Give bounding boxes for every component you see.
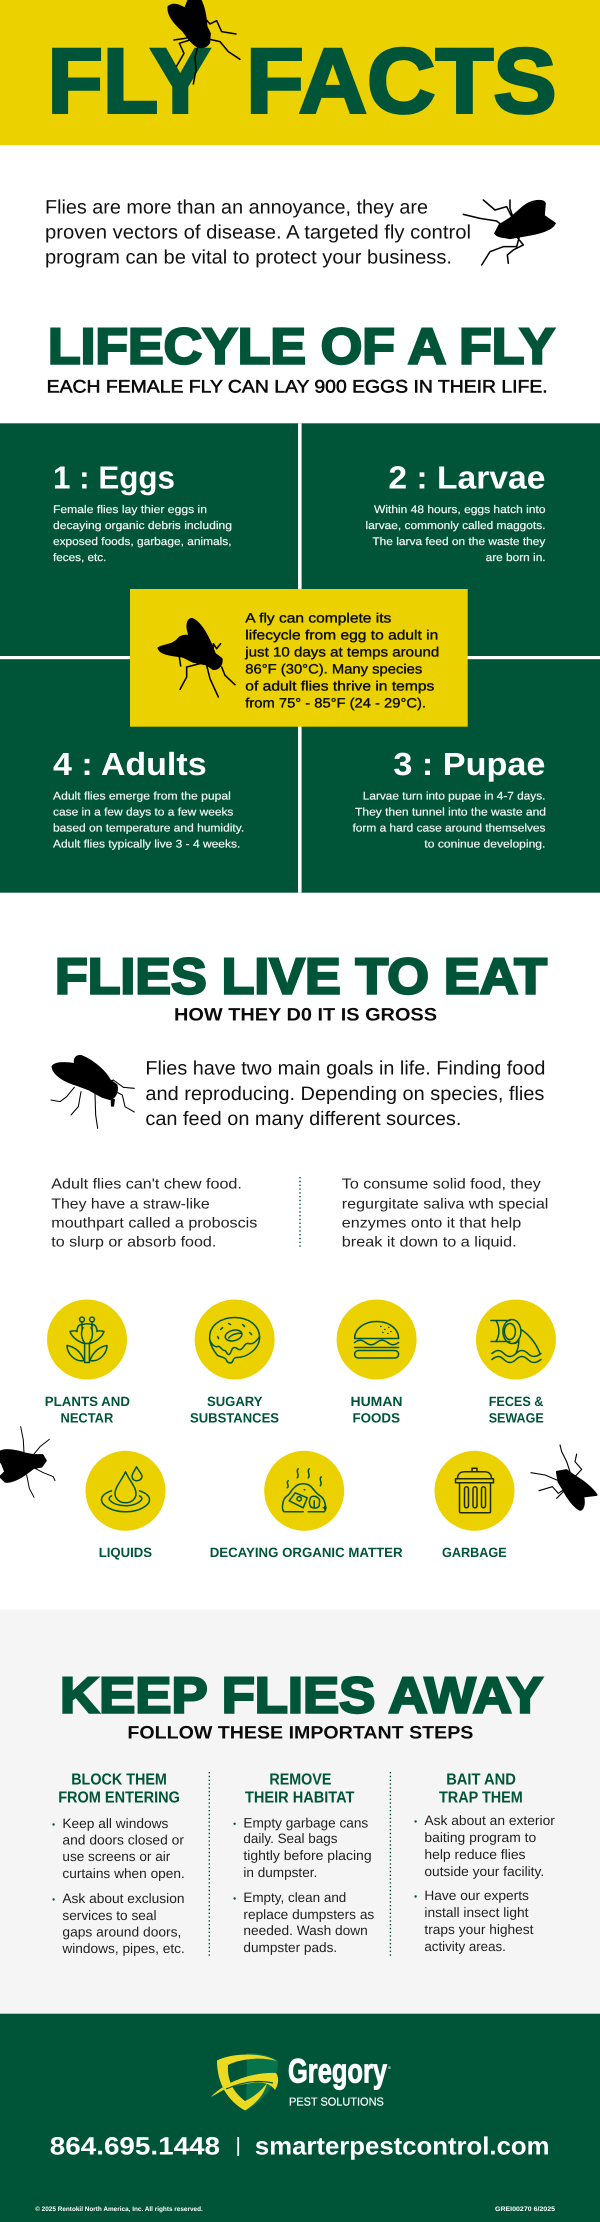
callout: temperature: lifecycle from egg to adult in xyxy=(245,627,438,642)
label: SUGARY xyxy=(207,1394,262,1409)
food source: feces and sewage xyxy=(476,1300,556,1426)
callout: temperature xyxy=(130,589,468,727)
logo: wordmark: ® xyxy=(388,2065,391,2070)
job code: GREI00270 6/2025 xyxy=(495,2206,555,2213)
subheading: how: HOW THEY D0 IT IS GROSS xyxy=(174,1005,437,1025)
column: remove habitat xyxy=(233,1771,374,1955)
title: facts: FACTS xyxy=(246,31,556,133)
label xyxy=(489,1394,544,1426)
icon: water drop xyxy=(102,1467,150,1512)
intro paragraph: proven vectors of disease. A targeted fly control xyxy=(45,222,471,244)
text: saliva: break it down to a liquid. xyxy=(342,1235,517,1251)
icon: fly in callout xyxy=(158,619,235,697)
footer xyxy=(0,2014,600,2222)
step 4: adults: case in a few days to a few weeks xyxy=(53,806,234,818)
text: proboscis: They have a straw-like xyxy=(51,1196,210,1212)
callout: temperature: from 75° - 85°F (24 - 29°C). xyxy=(245,695,426,710)
step 4: adults: based on temperature and humidity. xyxy=(53,822,244,834)
step 1: eggs: Female flies lay thier eggs in xyxy=(53,504,207,516)
column: bait and trap: install insect light xyxy=(424,1905,529,1920)
step 4: adults: Adult flies emerge from the pupal xyxy=(53,790,231,802)
intro paragraph: program can be vital to protect your business. xyxy=(45,246,452,268)
label: SEWAGE xyxy=(489,1411,544,1426)
icon: fly right edge xyxy=(531,1445,597,1510)
step 1: eggs: decaying organic debris including xyxy=(53,520,232,532)
subheading: eggs: EACH FEMALE FLY CAN LAY 900 EGGS IN THEIR LIFE. xyxy=(47,377,548,397)
intro paragraph: Flies are more than an annoyance, they are xyxy=(45,196,428,218)
icon: fly beside goals xyxy=(51,1056,134,1128)
text: two main goals: can feed on many different sources. xyxy=(145,1108,461,1130)
column: block them: gaps around doors, xyxy=(62,1924,181,1939)
label xyxy=(350,1394,402,1426)
text: two main goals xyxy=(145,1058,545,1130)
step 3: pupae: They then tunnel into the waste and xyxy=(355,806,546,818)
column: bait and trap: activity areas. xyxy=(424,1939,506,1954)
column: block them: services to seal xyxy=(62,1908,156,1923)
text: proboscis: mouthpart called a proboscis xyxy=(51,1216,257,1232)
copyright: © 2025 Rentokil North America, Inc. All rights reserved. xyxy=(35,2206,203,2213)
subheading: steps: FOLLOW THESE IMPORTANT STEPS xyxy=(127,1722,473,1742)
column: bait and trap: Have our experts xyxy=(424,1888,529,1903)
column: remove habitat: Empty garbage cans xyxy=(243,1815,368,1830)
column: block them: BLOCK THEM xyxy=(71,1771,167,1788)
icon: donut xyxy=(210,1318,260,1363)
icon: flower xyxy=(67,1317,107,1362)
step 2: larvae: The larva feed on the waste they xyxy=(372,536,546,548)
column: remove habitat: REMOVE xyxy=(269,1771,332,1788)
text: saliva: enzymes onto it that help xyxy=(342,1216,521,1232)
column: remove habitat: needed. Wash down xyxy=(243,1923,368,1938)
label: DECAYING ORGANIC MATTER xyxy=(210,1545,403,1560)
callout: temperature: A fly can complete its xyxy=(245,610,392,625)
food source: sugary substances xyxy=(190,1300,279,1426)
phone number: 864.695.1448 xyxy=(50,2132,220,2160)
column: bait and trap xyxy=(414,1771,555,1954)
column: bait and trap: baiting program to xyxy=(424,1830,536,1845)
header banner xyxy=(0,0,600,145)
step 3: pupae xyxy=(352,746,546,850)
column: block them: use screens or air xyxy=(62,1849,171,1864)
panel: keep flies away xyxy=(0,1610,600,2014)
step 2: larvae: Within 48 hours, eggs hatch into xyxy=(374,504,546,516)
step 1: eggs: exposed foods, garbage, animals, xyxy=(53,536,232,548)
text: saliva: To consume solid food, they xyxy=(342,1177,542,1193)
column: remove habitat: replace dumpsters as xyxy=(243,1907,374,1922)
text: saliva xyxy=(342,1177,548,1251)
step 1: eggs: feces, etc. xyxy=(53,552,106,564)
step 3: pupae: Larvae turn into pupae in 4-7 days. xyxy=(363,790,545,802)
column: bait and trap: outside your facility. xyxy=(424,1864,544,1879)
label: GARBAGE xyxy=(442,1545,507,1560)
column: bait and trap: BAIT AND xyxy=(446,1771,516,1788)
icon: sewage pipe xyxy=(491,1320,541,1362)
food source: liquids xyxy=(86,1451,166,1560)
food source: plants and nectar xyxy=(45,1300,130,1426)
column: block them: FROM ENTERING xyxy=(58,1789,180,1806)
logo: wordmark: Gregory xyxy=(288,2053,387,2091)
column: bait and trap: help reduce flies xyxy=(424,1847,526,1862)
column: remove habitat: tightly before placing xyxy=(243,1848,372,1863)
column: remove habitat: daily. Seal bags xyxy=(243,1831,338,1846)
column: bait and trap: Ask about an exterior xyxy=(424,1813,555,1828)
icon: decaying pile xyxy=(283,1469,326,1512)
food source: human foods xyxy=(337,1300,417,1426)
step 3: pupae: to coninue developing. xyxy=(424,838,545,850)
step 2: larvae xyxy=(366,459,546,564)
intro paragraph xyxy=(45,196,471,268)
column: remove habitat: in dumpster. xyxy=(243,1865,317,1880)
callout: temperature: of adult flies thrive in temps xyxy=(245,678,435,693)
heading: keep flies away: KEEP FLIES AWAY xyxy=(60,1667,543,1724)
website: smarterpestcontrol.com xyxy=(255,2132,550,2160)
step 4: adults: 4 : Adults xyxy=(53,746,207,782)
callout: temperature: just 10 days at temps around xyxy=(244,644,439,659)
column: block them xyxy=(52,1771,185,1956)
step 2: larvae: larvae, commonly called maggots. xyxy=(366,520,546,532)
logo: wordmark: PEST SOLUTIONS xyxy=(289,2096,384,2108)
heading: lifecycle xyxy=(47,317,555,397)
heading: lifecycle: LIFECYLE OF A FLY xyxy=(48,317,555,374)
column: remove habitat: Empty, clean and xyxy=(243,1890,346,1905)
food source: garbage xyxy=(434,1451,514,1560)
step 4: adults: Adult flies typically live 3 - 4 weeks. xyxy=(53,838,240,850)
step 1: eggs xyxy=(53,459,232,564)
column: remove habitat: THEIR HABITAT xyxy=(245,1789,355,1806)
column: block them: and doors closed or xyxy=(62,1832,184,1848)
label: NECTAR xyxy=(60,1411,114,1426)
text: two main goals: Flies have two main goals in life. Finding food xyxy=(145,1058,545,1080)
logo: gregory shield xyxy=(211,2053,278,2111)
icon: fly left edge xyxy=(0,1427,55,1497)
heading: flies live to eat xyxy=(55,947,547,1025)
label: HUMAN xyxy=(350,1394,402,1409)
label xyxy=(190,1394,279,1426)
food source: decaying organic matter xyxy=(210,1451,403,1560)
column: bait and trap: TRAP THEM xyxy=(439,1789,523,1806)
panel: lifecycle grid xyxy=(0,423,600,893)
column: remove habitat: dumpster pads. xyxy=(243,1940,337,1955)
text: proboscis: Adult flies can't chew food. xyxy=(51,1177,242,1193)
logo: wordmark xyxy=(288,2053,391,2108)
column: block them: curtains when open. xyxy=(62,1866,185,1881)
label: LIQUIDS xyxy=(99,1545,152,1560)
step 3: pupae: form a hard case around themselves xyxy=(352,822,546,834)
icon: burger xyxy=(355,1322,399,1358)
text: two main goals: and reproducing. Depending on species, flies xyxy=(145,1083,545,1105)
icon: trash can xyxy=(456,1468,494,1513)
icon: fly beside intro xyxy=(463,200,555,265)
text: proboscis xyxy=(51,1177,257,1251)
text: saliva: regurgitate saliva wth special xyxy=(342,1196,548,1212)
column: block them: Keep all windows xyxy=(62,1816,169,1831)
column: bait and trap: traps your highest xyxy=(424,1922,534,1937)
step 3: pupae: 3 : Pupae xyxy=(393,746,545,782)
step 1: eggs: 1 : Eggs xyxy=(53,459,175,495)
icon: fly on title xyxy=(168,0,240,84)
step 4: adults xyxy=(53,746,244,850)
label: SUBSTANCES xyxy=(190,1411,279,1426)
callout: temperature: 86°F (30°C). Many species xyxy=(245,661,423,676)
label: FECES & xyxy=(489,1394,544,1409)
label: PLANTS AND xyxy=(45,1394,130,1409)
text: proboscis: to slurp or absorb food. xyxy=(51,1235,216,1251)
column: block them: windows, pipes, etc. xyxy=(61,1941,185,1956)
label xyxy=(45,1394,130,1426)
title: fly: FLY xyxy=(48,31,210,133)
label: FOODS xyxy=(352,1411,400,1426)
column: block them: Ask about exclusion xyxy=(62,1891,184,1906)
step 2: larvae: are born in. xyxy=(486,552,546,564)
step 2: larvae: 2 : Larvae xyxy=(388,459,545,495)
heading: flies live to eat: FLIES LIVE TO EAT xyxy=(55,947,547,1004)
